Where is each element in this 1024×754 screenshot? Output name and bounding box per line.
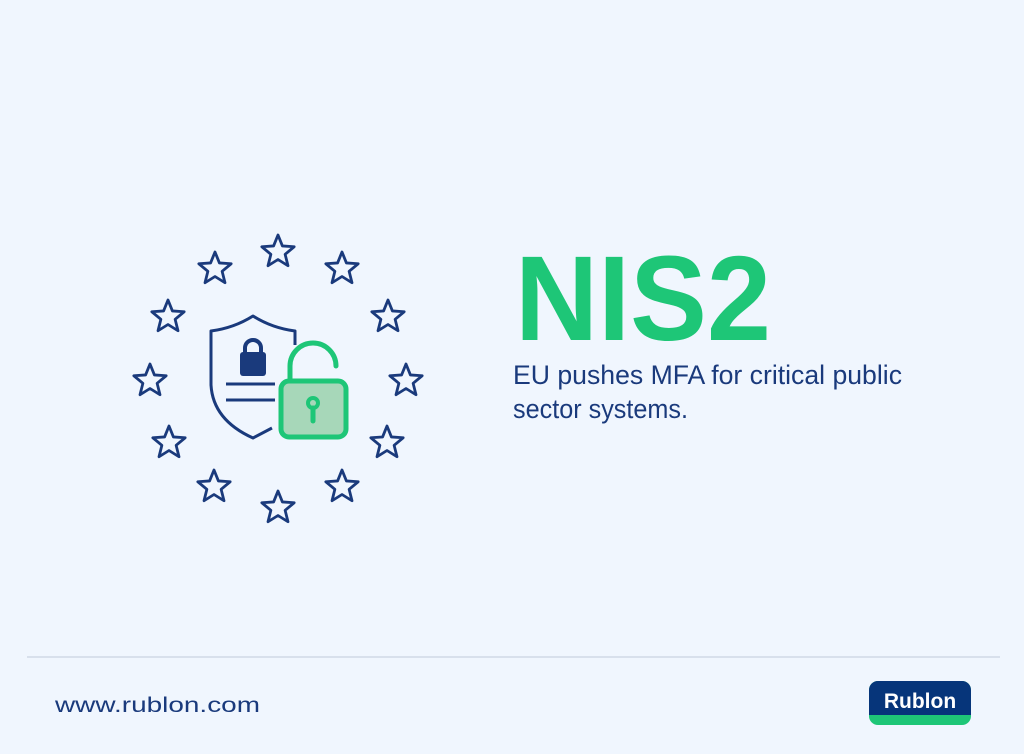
logo: Rublon [869,681,971,725]
subtitle: EU pushes MFA for critical public [513,360,902,390]
icon: EU star circle [134,235,422,522]
icon: shield with lock [211,316,295,438]
footer url: www.rublon.com [54,694,260,717]
logo: Rublon: Rublon [884,690,956,713]
subtitle: sector systems. [513,394,688,424]
title: NIS2 [515,230,771,366]
icon: open green padlock [281,343,346,437]
